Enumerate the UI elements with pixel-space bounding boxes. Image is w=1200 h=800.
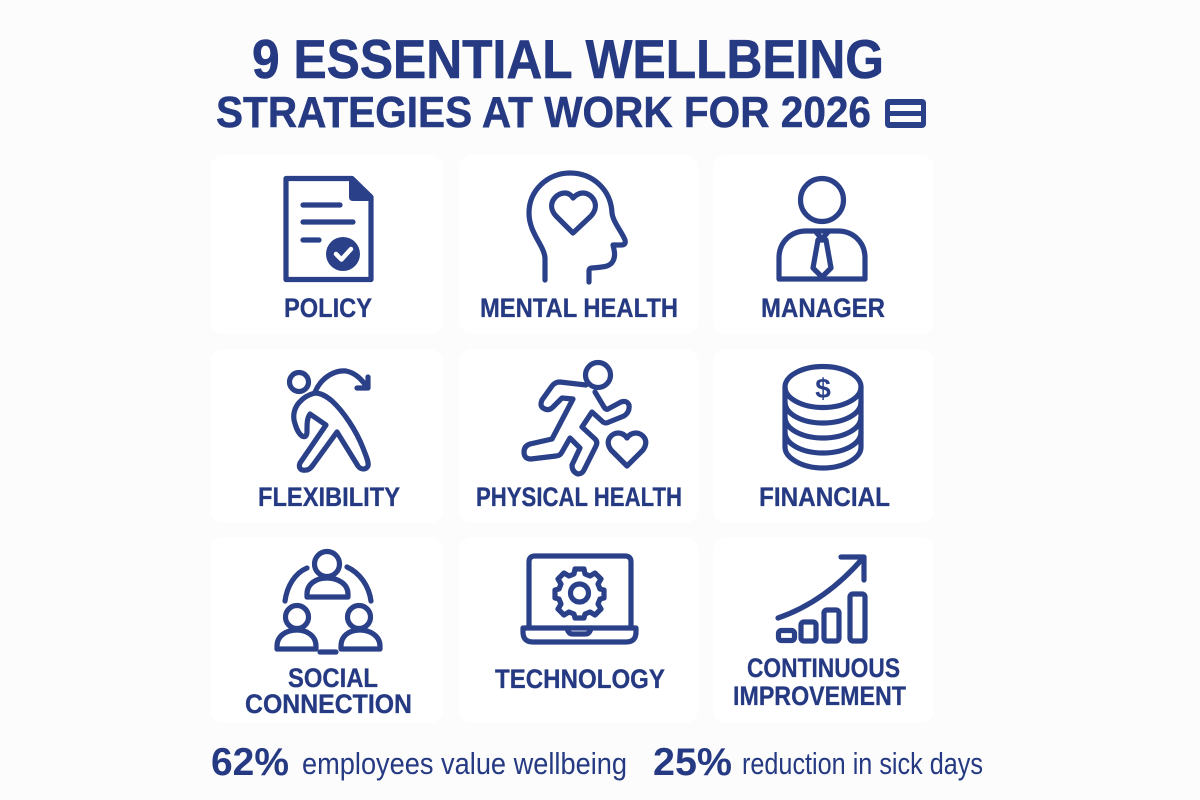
stat: employees value wellbeing: employees value wellbeing xyxy=(302,746,627,781)
panel: policy xyxy=(210,155,443,334)
panel: social connection xyxy=(210,537,443,723)
label: policy: POLICY xyxy=(284,293,372,323)
label: technology: TECHNOLOGY xyxy=(495,664,665,694)
label: social connection: SOCIAL xyxy=(288,663,378,693)
icon: coin stack: $ xyxy=(815,373,831,404)
title xyxy=(216,28,884,137)
icon: policy document xyxy=(286,177,373,280)
icon: growth chart xyxy=(778,557,865,641)
icon: runner with heart xyxy=(524,362,646,474)
icon: coin stack xyxy=(785,366,861,468)
stat: reduction in sick days: 25% xyxy=(653,741,732,784)
icon: connected people xyxy=(277,552,380,652)
panel: flexibility xyxy=(210,349,443,523)
icon: manager xyxy=(779,178,865,279)
panel: manager xyxy=(713,155,934,334)
title: 9 ESSENTIAL WELLBEING xyxy=(252,28,884,90)
label: flexibility: FLEXIBILITY xyxy=(258,482,400,512)
panel: continuous improvement xyxy=(713,537,934,723)
label: mental health: MENTAL HEALTH xyxy=(480,293,678,323)
label: manager: MANAGER xyxy=(761,293,885,323)
icon: laptop with gear xyxy=(523,556,636,642)
label: social connection: CONNECTION xyxy=(245,689,412,719)
panel: physical health xyxy=(459,349,698,523)
label: physical health: PHYSICAL HEALTH xyxy=(476,482,682,512)
stat: reduction in sick days xyxy=(653,741,983,784)
stat: reduction in sick days: reduction in sick days xyxy=(742,746,983,781)
icon: stretching figure xyxy=(290,371,368,470)
label: financial: FINANCIAL xyxy=(759,482,890,512)
title: STRATEGIES AT WORK FOR 2026 xyxy=(216,88,871,137)
label: continuous improvement xyxy=(733,653,906,711)
icon: title badge xyxy=(885,99,926,128)
stat: employees value wellbeing: 62% xyxy=(211,741,289,784)
label: continuous improvement: IMPROVEMENT xyxy=(733,681,906,711)
stat: employees value wellbeing xyxy=(211,741,627,784)
panel: mental health xyxy=(459,155,698,334)
panel: technology xyxy=(459,537,698,723)
icon: head with heart xyxy=(529,173,625,282)
label: continuous improvement: CONTINUOUS xyxy=(747,653,900,683)
panel: financial xyxy=(713,349,934,523)
label: social connection xyxy=(245,663,412,719)
